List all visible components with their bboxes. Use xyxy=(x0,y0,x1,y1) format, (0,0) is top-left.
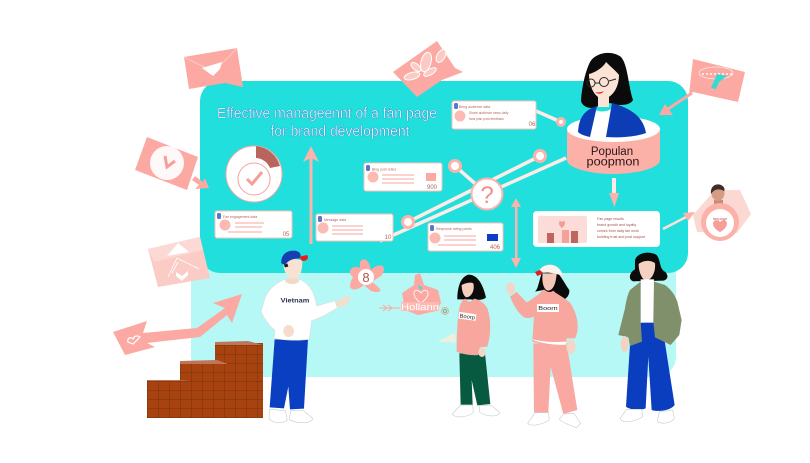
icon: clock tag xyxy=(135,137,198,190)
icon: brick staircase xyxy=(147,341,263,418)
card: post one xyxy=(364,163,442,191)
icon: leaf tag xyxy=(393,41,463,97)
card: bar chart summary xyxy=(533,211,660,247)
arrow: rising growth arrow with heart xyxy=(113,294,242,355)
figure: man in blue cap with Vietnam sweatshirt: Vietnam xyxy=(281,299,309,305)
figure: man in blue cap with Vietnam sweatshirt xyxy=(261,251,351,423)
title: for brand dévelopment xyxy=(270,123,410,140)
arrow: upward growth xyxy=(303,146,319,244)
figure: woman in green jacket and blue trousers xyxy=(618,253,682,423)
icon: social tag top right xyxy=(689,59,745,102)
connector nodes xyxy=(402,118,564,228)
icon: fan avatar badge xyxy=(693,184,751,241)
icon: question mark circle xyxy=(472,178,502,210)
icon: pink flower badge xyxy=(350,259,384,292)
chart card caption: brand growth and loyalty xyxy=(597,223,636,227)
figure: woman in pink sweater and green trousers xyxy=(438,275,500,417)
panel: populan cylinder: poopmon xyxy=(586,156,640,168)
card: post four: Response rating points xyxy=(436,227,472,231)
icon: follow bag with heart xyxy=(379,273,448,315)
card: post five: fans plan post feedback xyxy=(469,117,504,121)
bar chart with heart xyxy=(547,221,578,243)
chart card caption: comes from daily fan work xyxy=(597,229,639,233)
panel: populan cylinder: Populan xyxy=(591,146,633,158)
chart card caption xyxy=(597,217,645,239)
arrow: vertical double headed xyxy=(511,198,521,268)
chart card caption: building trust and post support xyxy=(597,235,645,239)
icon: fan avatar badge: fanpage xyxy=(713,216,728,221)
card: post five: Bring audience data xyxy=(459,105,490,109)
icon: follow bag with heart: Hollann xyxy=(401,302,439,313)
card: post three: 10 xyxy=(385,235,392,241)
arrow: social tag to presenter xyxy=(659,93,692,115)
card: post two: Fan engagement data xyxy=(223,215,257,219)
figure: presenter woman with glasses xyxy=(578,53,646,137)
figure: woman in cap and pink tracksuit xyxy=(506,265,581,428)
title: Effective manageennt of a fán page xyxy=(217,105,437,122)
title xyxy=(217,105,437,140)
panel: populan cylinder xyxy=(567,116,660,174)
card: post five: Share audience news daily xyxy=(469,111,509,115)
card: post one: 900 xyxy=(427,185,438,191)
card: post one: Blog post notes xyxy=(372,168,396,172)
arrow: chart card to fan xyxy=(663,212,695,229)
panel: main teal board xyxy=(200,81,688,273)
icon: question mark circle: ? xyxy=(480,182,494,209)
icon: envelope photo tag xyxy=(148,237,210,287)
arrow: clock tag to board xyxy=(192,176,209,189)
icon: envelope tag top left xyxy=(184,48,243,89)
card: post four xyxy=(428,223,503,251)
icon: donut progress chart xyxy=(226,146,282,202)
card: post three: Message data xyxy=(324,218,346,222)
card: post five xyxy=(452,101,536,129)
card: post three xyxy=(316,214,393,241)
card: post four: 406 xyxy=(490,245,501,251)
panel: light lower background xyxy=(191,250,676,377)
arrow: cylinder down to chart card xyxy=(609,178,619,207)
icon: pink flower badge: 8 xyxy=(362,270,370,285)
chart card caption: Fan page results xyxy=(597,217,624,221)
figure: woman in pink sweater and green trousers: Boorp xyxy=(459,313,475,321)
figure: woman in cap and pink tracksuit: Boorn xyxy=(538,306,558,312)
card: post two xyxy=(215,211,292,238)
card: post five: 06 xyxy=(529,122,536,128)
connector lines network xyxy=(380,111,566,241)
card: post two: 05 xyxy=(283,232,290,238)
